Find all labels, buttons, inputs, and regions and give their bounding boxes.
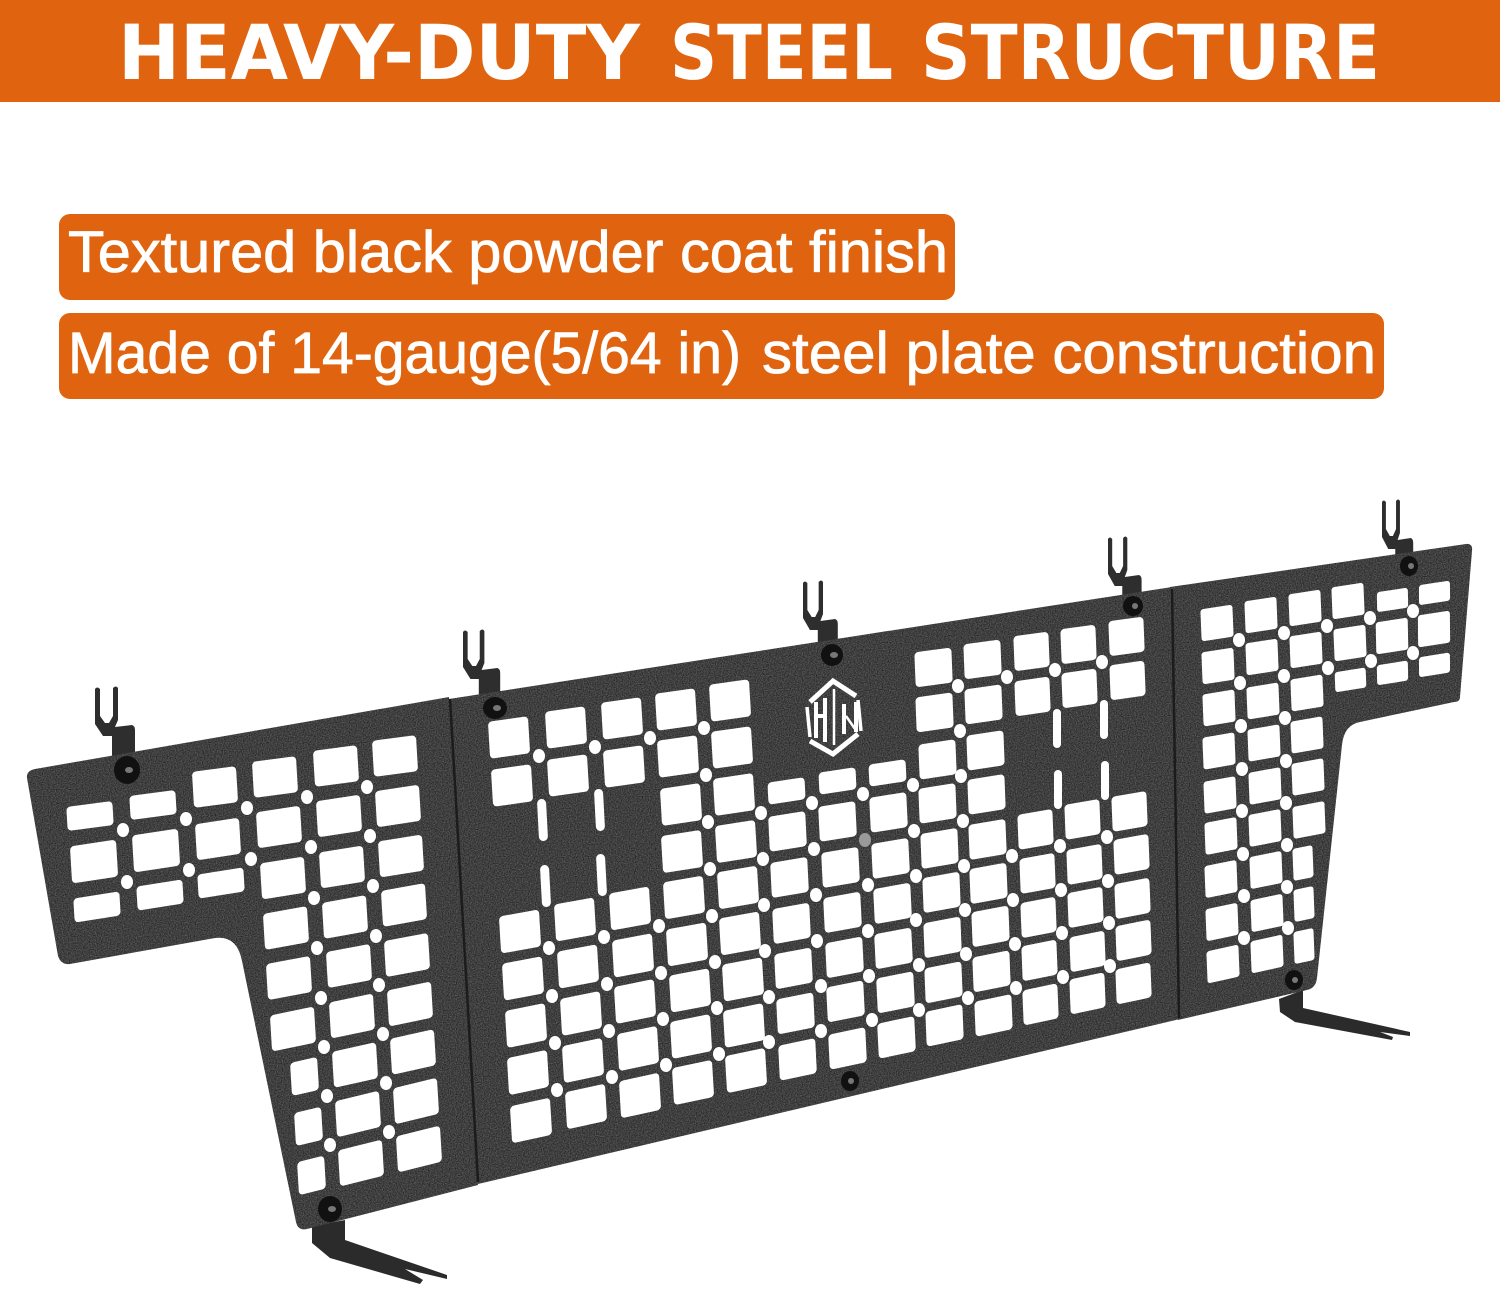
title banner: STEEL [670,8,893,97]
lower mounting brackets [312,990,1410,1284]
panel: center section [449,587,1180,1184]
title banner [0,0,1500,102]
fold lines [450,589,1179,1182]
title banner: STRUCTURE [921,8,1380,97]
title banner: HEAVY-DUTY [118,8,641,97]
panel: right section [1170,544,1472,1020]
product: steel molle panel [27,500,1472,1284]
callout: finish: Textured black powder coat finish [68,220,948,285]
upper mounting hooks [95,500,1413,762]
callout: construction [59,313,1384,399]
callout: construction: Made of 14-gauge(5/64 in) [68,321,741,386]
callout: construction: steel plate construction [762,321,1376,386]
panel: left section [27,697,478,1229]
left section cut-outs [66,735,442,1195]
right section cut-outs [1200,581,1450,984]
center section cut-outs [488,617,1152,1143]
screws [114,556,1418,1222]
icon: hexagon brand logo [807,681,861,754]
